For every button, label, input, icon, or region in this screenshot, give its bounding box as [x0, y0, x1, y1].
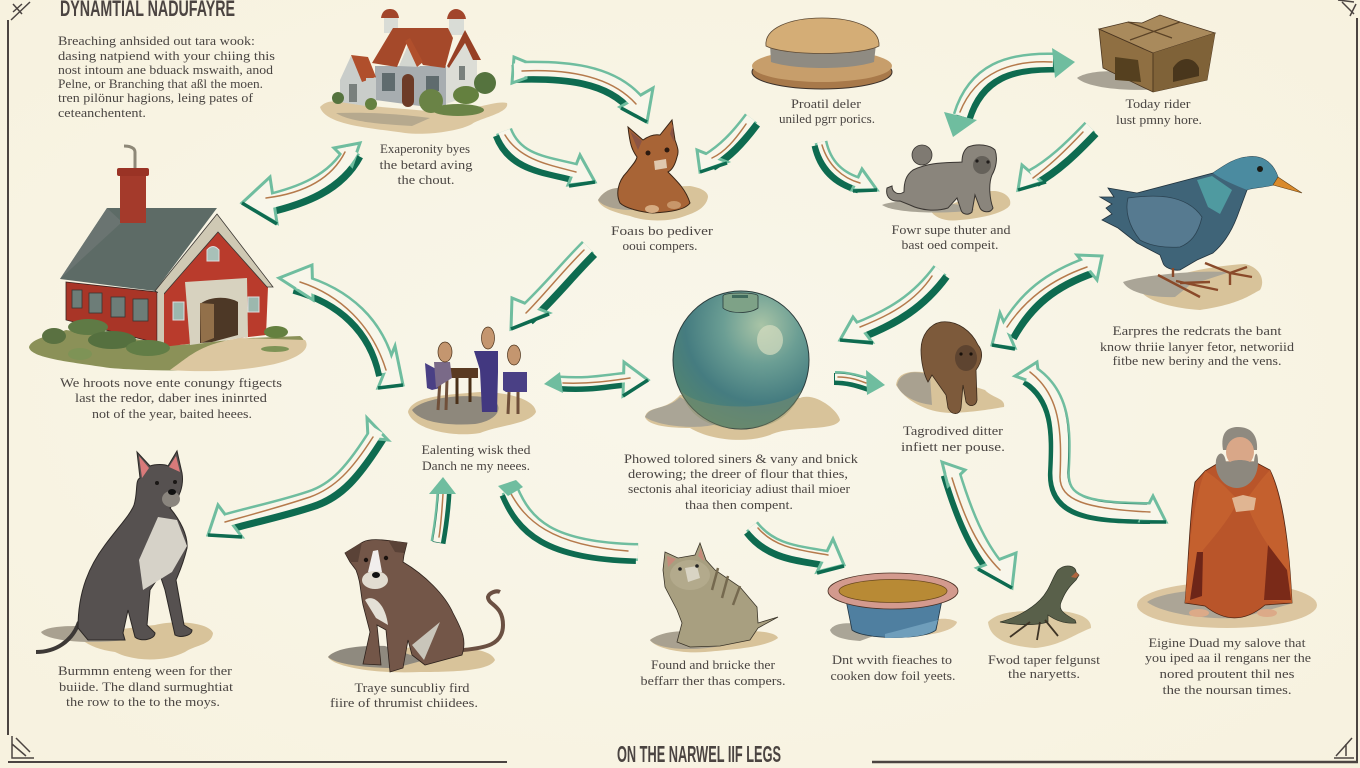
caption: pug: [892, 223, 1011, 252]
arrow: brown dog to figures: [429, 477, 456, 543]
caption: brown cat: [611, 224, 714, 253]
caption: house: Exaperonity byes: [380, 142, 470, 156]
caption: barn: not of the year, baited heees.: [92, 407, 252, 421]
illustration: food bowl: [828, 573, 958, 641]
arrow: bird to bear: [992, 255, 1102, 349]
caption: barn: [60, 376, 282, 421]
arrow: figures to grey dog: [208, 418, 388, 537]
caption: small bird: Fwod taper felgunst: [988, 653, 1101, 667]
caption: bear: infiett ner pouse.: [901, 440, 1005, 454]
caption: tabby cat: Found and brıicke ther: [651, 658, 776, 672]
caption: bird: [1100, 324, 1295, 368]
caption: bird: know thriie lanyer fetor, networiid: [1100, 340, 1295, 354]
arrow: barn to figures: [279, 265, 403, 388]
caption: barn: We hroots nove ente conungy ftigects: [60, 376, 282, 390]
arrow: cat to figures: [511, 247, 591, 329]
caption: house: the betard aving: [380, 158, 473, 172]
illustration: brown cat: [598, 120, 708, 220]
caption: monk: Eigine Duad my salove that: [1148, 636, 1306, 650]
caption: house: the chout.: [398, 173, 454, 187]
arrow: globe to bear: [834, 370, 885, 395]
illustration: grey dog: [36, 451, 213, 660]
caption: monk: the the noursan times.: [1162, 683, 1292, 697]
caption: brown dog: Traye suncubliy fird: [354, 681, 470, 695]
arrow: globe to bowl: [750, 526, 844, 573]
arrow: double curve near block: [944, 48, 1075, 137]
caption: globe: thaa then compent.: [685, 498, 793, 512]
caption: block: Today rider: [1126, 97, 1191, 111]
caption: house: [380, 142, 473, 187]
illustration: blue bird: [1100, 157, 1302, 310]
illustration: brown dog: [328, 540, 503, 672]
illustration: grey pug: [882, 145, 1010, 221]
caption: bear: Tagrodived ditter: [903, 424, 1004, 438]
intro text block: tren pilönur hagions, leing pates of: [58, 91, 254, 105]
illustration: brown bear: [896, 322, 1004, 414]
arrow: bear to monk: [1015, 362, 1166, 522]
caption: brown dog: fiire of thrumist chiidees.: [330, 696, 478, 710]
caption: brown dog: [330, 681, 478, 710]
caption: bowl: [830, 653, 956, 683]
arrow: block to pug: [1018, 127, 1093, 190]
arrow: top curve to brown cat: [512, 57, 653, 122]
caption: bowl: Dnt wvith fieaches to: [832, 653, 952, 667]
intro text block: Breaching anhsided out tara wook:: [58, 34, 255, 48]
caption: globe: derowing; the dreer of flour that thies,: [628, 467, 848, 481]
illustration: small green bird: [988, 566, 1091, 648]
caption: monk: nored proutent thil nes: [1160, 667, 1295, 681]
caption: grey dog: Burmmn enteng ween for ther: [58, 664, 233, 678]
caption: pug: Fowr supe thuter and: [892, 223, 1011, 237]
caption: disk: uniled pgrr porics.: [779, 112, 875, 126]
illustration: monk in orange robe: [1137, 427, 1317, 628]
caption: grey dog: the row to the to the moys.: [66, 695, 220, 709]
caption: globe: sectonis ahal iteoriciay adiust thail mioer: [628, 482, 851, 496]
caption: pug: bast oed compeit.: [902, 238, 998, 252]
caption: bird: fitbe new beriny and the vens.: [1112, 354, 1282, 368]
caption: small bird: the naryetts.: [1008, 667, 1080, 681]
intro text block: nost intoum ane bduack mswaith, anod: [58, 63, 274, 77]
illustration: wooden disk and dome: [752, 18, 892, 89]
caption: barn: last the redor, daber ines ininrted: [75, 391, 268, 405]
caption: figures: Ealenting wisk thed: [422, 443, 531, 457]
caption: tabby cat: [640, 658, 786, 688]
caption: bear: [901, 424, 1005, 454]
caption: block: lust pmny hore.: [1116, 113, 1202, 127]
caption: globe: [624, 452, 859, 512]
illustration: red barn: [29, 146, 307, 371]
caption: grey dog: buiide. The dland surmughtiat: [59, 680, 234, 694]
caption: block: [1116, 97, 1202, 127]
caption: brown cat: ooui compers.: [622, 239, 698, 253]
caption: disk: Proatil deler: [791, 97, 862, 111]
illustration: three figures at a table: [408, 327, 536, 434]
caption: grey dog: [58, 664, 234, 709]
arrow: figures and globe: [544, 362, 648, 396]
arrow: tabby cat to figures: [498, 480, 638, 555]
caption: globe: Phowed tolored siners & vany and bnick: [624, 452, 859, 466]
caption: bird: Earpres the redcrats the bant: [1112, 324, 1282, 338]
caption: monk: [1145, 636, 1312, 697]
arrow: house to brown cat: [501, 131, 595, 186]
arrow: bear to globe: [840, 270, 943, 343]
illustration: wooden block: [1077, 15, 1215, 92]
caption: monk: you iped aa il rengans ner the: [1145, 651, 1312, 665]
illustration: teal globe: [645, 291, 840, 440]
arrow: disk to pug: [818, 142, 877, 191]
caption: figures: Danch ne my neees.: [422, 459, 530, 473]
arrow: disk to brown cat: [697, 118, 754, 172]
caption: small bird: [988, 653, 1101, 681]
bottom title: ON THE NARWEL IIF LEGS: [617, 741, 781, 767]
caption: tabby cat: beffarr ther thas compers.: [640, 674, 786, 688]
illustration: house on hill: [320, 9, 507, 134]
intro text block: dasing natpiend with your chiing this: [58, 49, 275, 63]
arrow: house to barn: [242, 143, 360, 224]
caption: brown cat: Foaıs bo pediver: [611, 224, 714, 238]
illustration: tabby cat: [650, 543, 778, 652]
intro text block: ceteanchentent.: [58, 106, 146, 120]
intro text block: [58, 34, 275, 120]
caption: figures: [422, 443, 531, 473]
intro text block: Pelne, or Branching that aßl the moen.: [58, 77, 263, 91]
arrow: bear to small bird: [942, 462, 1016, 588]
caption: disk: [779, 97, 875, 126]
caption: bowl: cooken dow foil yeets.: [830, 669, 956, 683]
